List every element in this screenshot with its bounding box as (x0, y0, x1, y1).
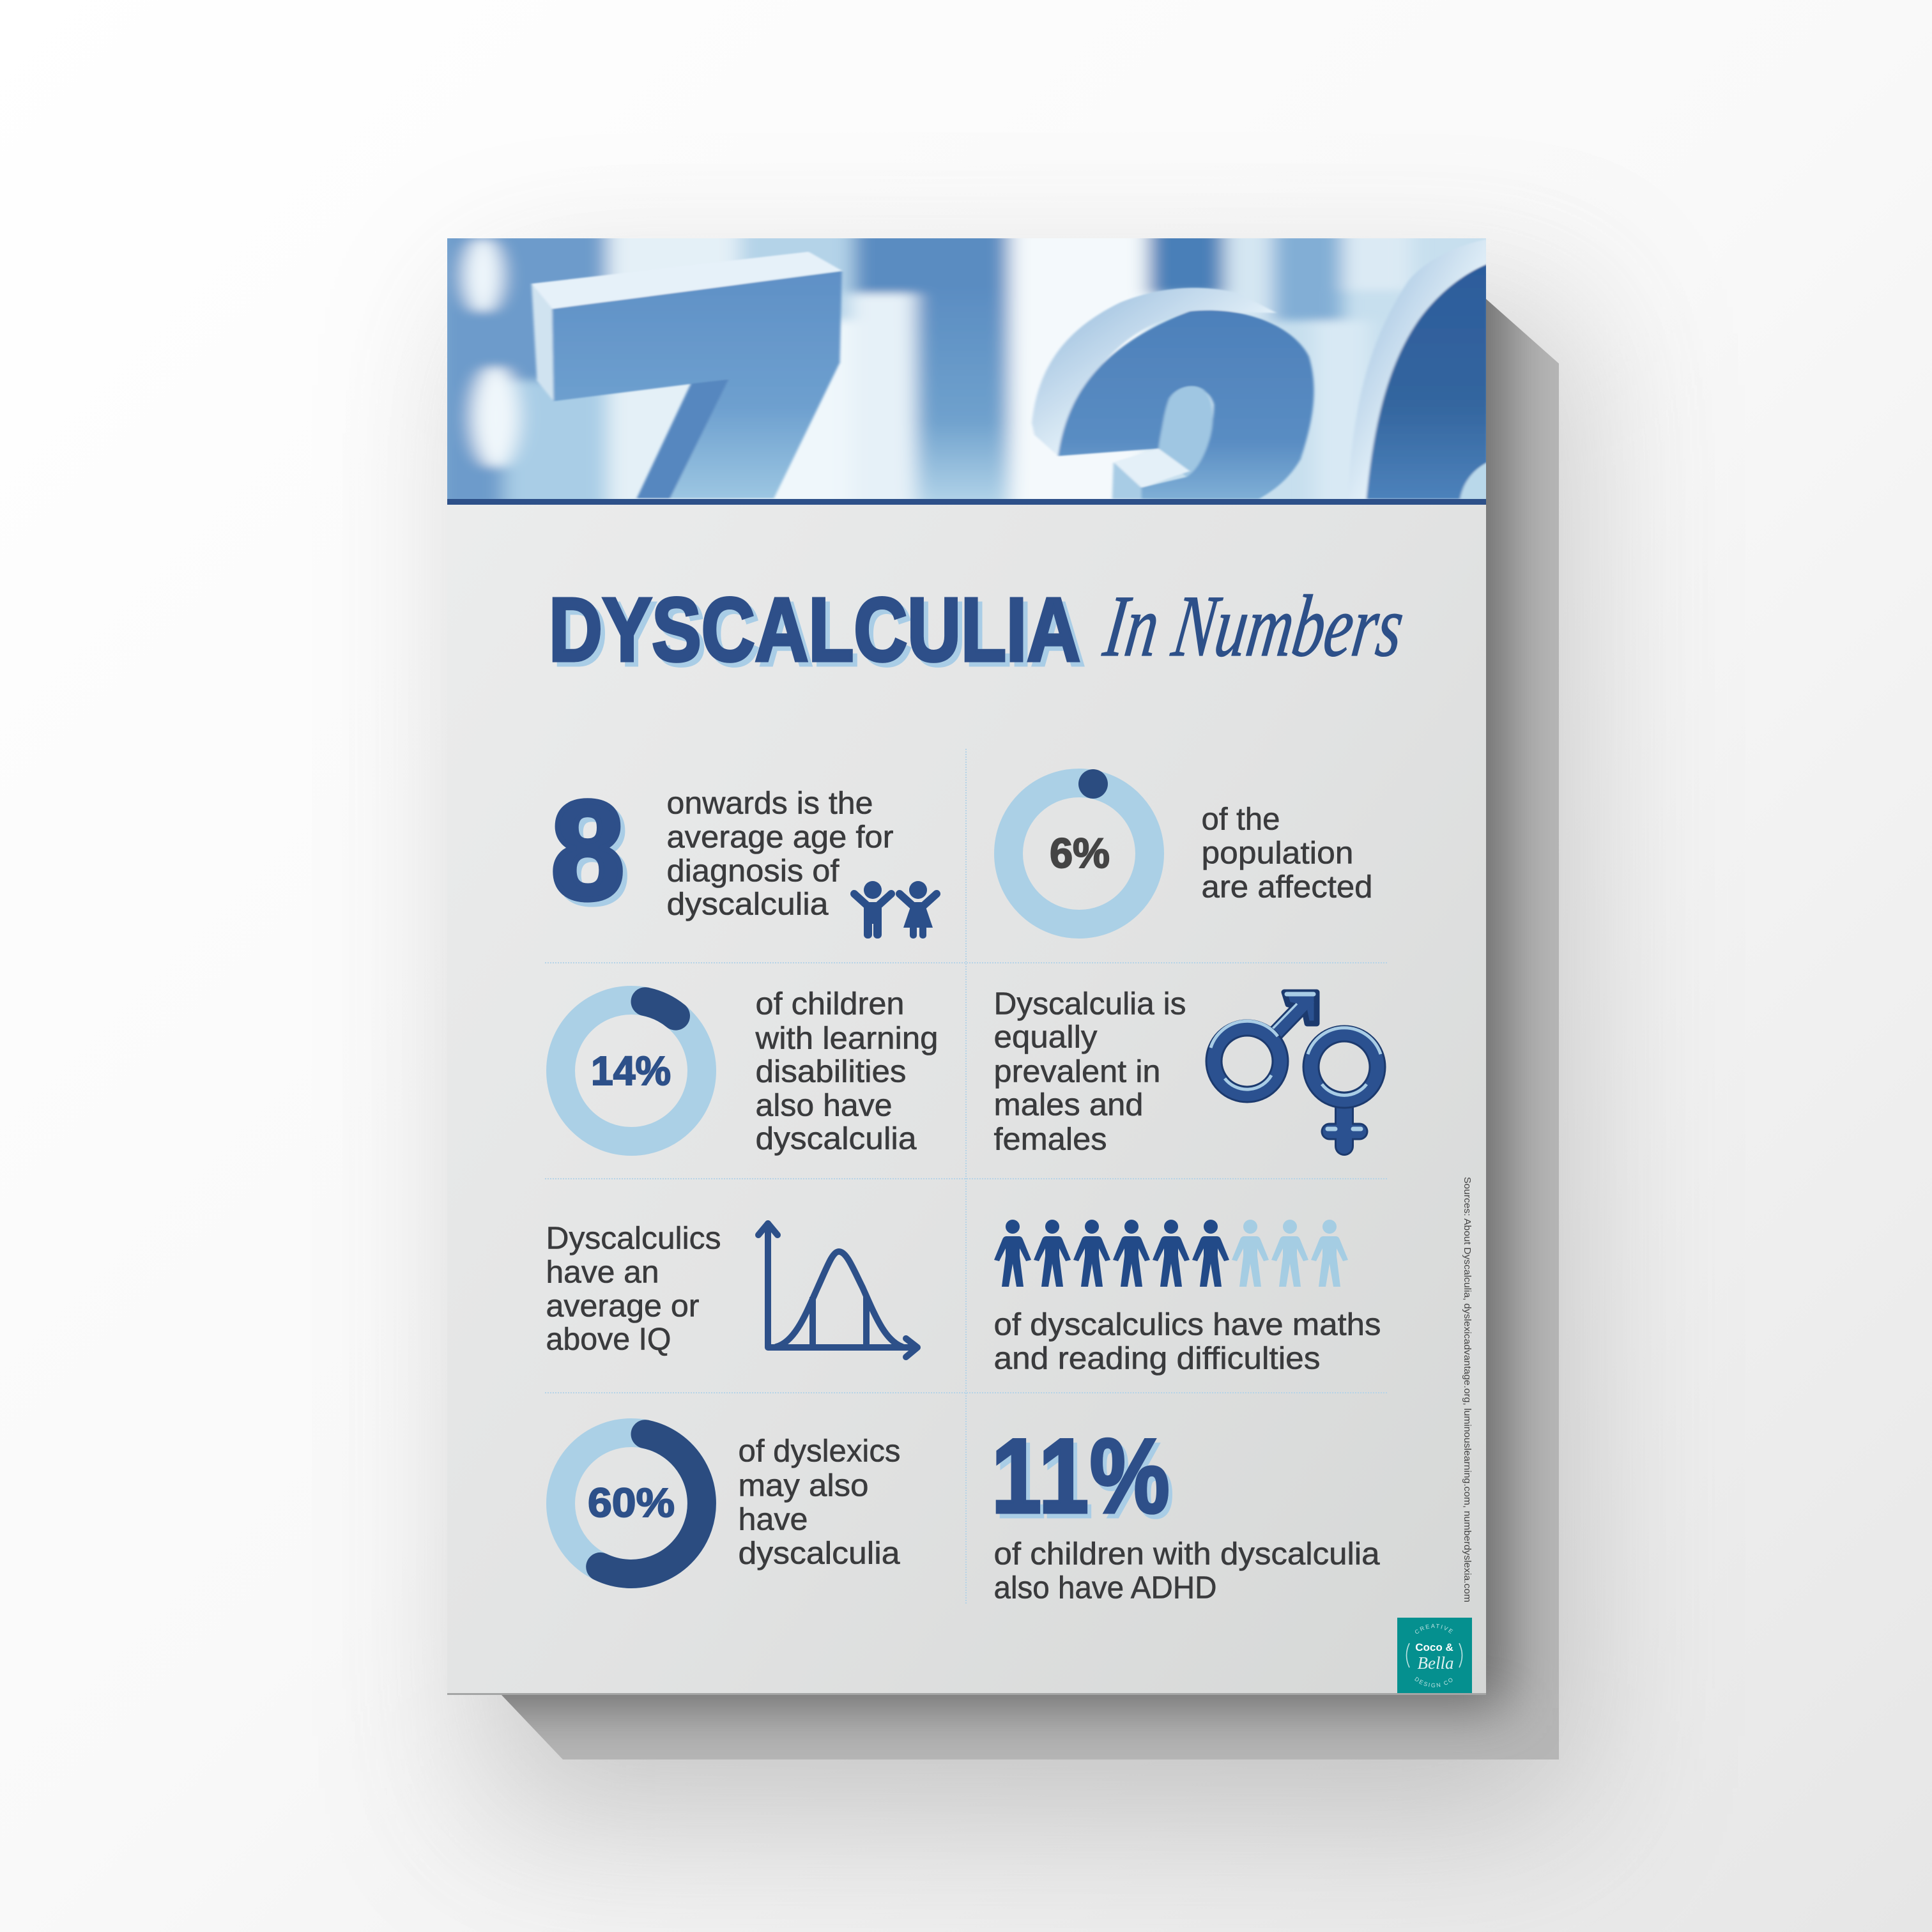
blurred background numbers (434, 230, 1411, 507)
dyslexics text: may also (739, 1468, 869, 1503)
age text: diagnosis of (667, 854, 839, 888)
poster sheet (447, 238, 1486, 1695)
logo badge: DESIGN CO (1414, 1676, 1453, 1687)
donut chart 60% (561, 1432, 702, 1574)
IQ text: Dyscalculics (546, 1222, 721, 1256)
logo badge: Coco & (1415, 1641, 1453, 1653)
learning disabilities text: also have (755, 1089, 892, 1123)
banner photo: 3D numbers (434, 230, 1488, 507)
gender text: males and (994, 1087, 1144, 1122)
panel: IQ (546, 1222, 917, 1357)
dyslexics text: dyscalculia (739, 1536, 900, 1570)
donut chart 60%: 60% (588, 1480, 675, 1526)
population text: of the (1201, 802, 1280, 837)
age text (667, 786, 893, 921)
age text: dyscalculia (667, 887, 829, 921)
population text: population (1201, 836, 1353, 870)
ADHD text: of children with dyscalculia (994, 1537, 1380, 1572)
sources note: Sources: About Dyscalculia, dyslexicadvantage.org, luminouslearning.com, numberdyslexia.com (1462, 1177, 1473, 1602)
title (549, 578, 1409, 680)
panel: maths and reading (994, 1220, 1381, 1376)
IQ text (546, 1222, 721, 1357)
logo badge: CREATIVE (1415, 1624, 1453, 1634)
maths text: of dyscalculics have maths (994, 1307, 1381, 1342)
maths text (994, 1307, 1381, 1376)
gender text: equally (994, 1020, 1098, 1054)
age text: onwards is the (667, 786, 873, 820)
poster cast shadow (502, 299, 1559, 1759)
dyslexics text: of dyslexics (739, 1434, 901, 1468)
population text: are affected (1201, 870, 1372, 905)
logo badge: Bella (1418, 1653, 1453, 1673)
icon: children (854, 881, 937, 939)
gender text: Dyscalculia is (994, 986, 1186, 1021)
icon: female symbol (1308, 1028, 1381, 1146)
age text: average age for (667, 820, 893, 855)
gender text: prevalent in (994, 1054, 1160, 1089)
dyslexics text (739, 1434, 901, 1570)
panel: 60 percent (561, 1432, 901, 1574)
digit 2 (1032, 288, 1314, 499)
donut chart 14%: 14% (591, 1048, 671, 1094)
title word: DYSCALCULIA: DYSCALCULIA (549, 579, 1080, 680)
panel: age 8 (551, 773, 937, 939)
maths text: and reading difficulties (994, 1342, 1320, 1376)
learning disabilities text: dyscalculia (755, 1122, 917, 1156)
panel: 6 percent (1008, 769, 1372, 924)
IQ text: have an (546, 1255, 659, 1289)
donut chart 6%: 6% (1050, 829, 1110, 877)
big number 11%: 11% (992, 1417, 1170, 1535)
learning disabilities text: of children (755, 986, 905, 1021)
ADHD text: also have ADHD (994, 1570, 1216, 1605)
IQ text: average or (546, 1289, 699, 1324)
panel: 14 percent (561, 986, 938, 1156)
ADHD text (994, 1537, 1380, 1605)
learning disabilities text: disabilities (755, 1054, 906, 1089)
digit 0 (1348, 239, 1488, 499)
panel: 11 percent (992, 1417, 1380, 1605)
gender text: females (994, 1122, 1107, 1156)
logo badge (1397, 1618, 1472, 1693)
chart: bell curve (758, 1223, 917, 1357)
panel: gender (994, 986, 1381, 1156)
donut chart 6% (1008, 769, 1150, 924)
grid dividers (545, 749, 1387, 1605)
digit 7 (532, 252, 842, 498)
learning disabilities text (755, 986, 938, 1156)
banner rule (447, 499, 1486, 505)
big number 8: 8 (551, 773, 624, 928)
dyslexics text: have (739, 1503, 808, 1537)
gender text (994, 986, 1186, 1156)
icon: male symbol (1211, 992, 1317, 1094)
IQ text: above IQ (546, 1322, 671, 1357)
pictogram: nine people (994, 1220, 1348, 1287)
learning disabilities text: with learning (755, 1021, 938, 1055)
donut chart 14% (561, 1000, 702, 1141)
title script: In Numbers: In Numbers (1098, 578, 1409, 675)
population text (1201, 802, 1372, 905)
